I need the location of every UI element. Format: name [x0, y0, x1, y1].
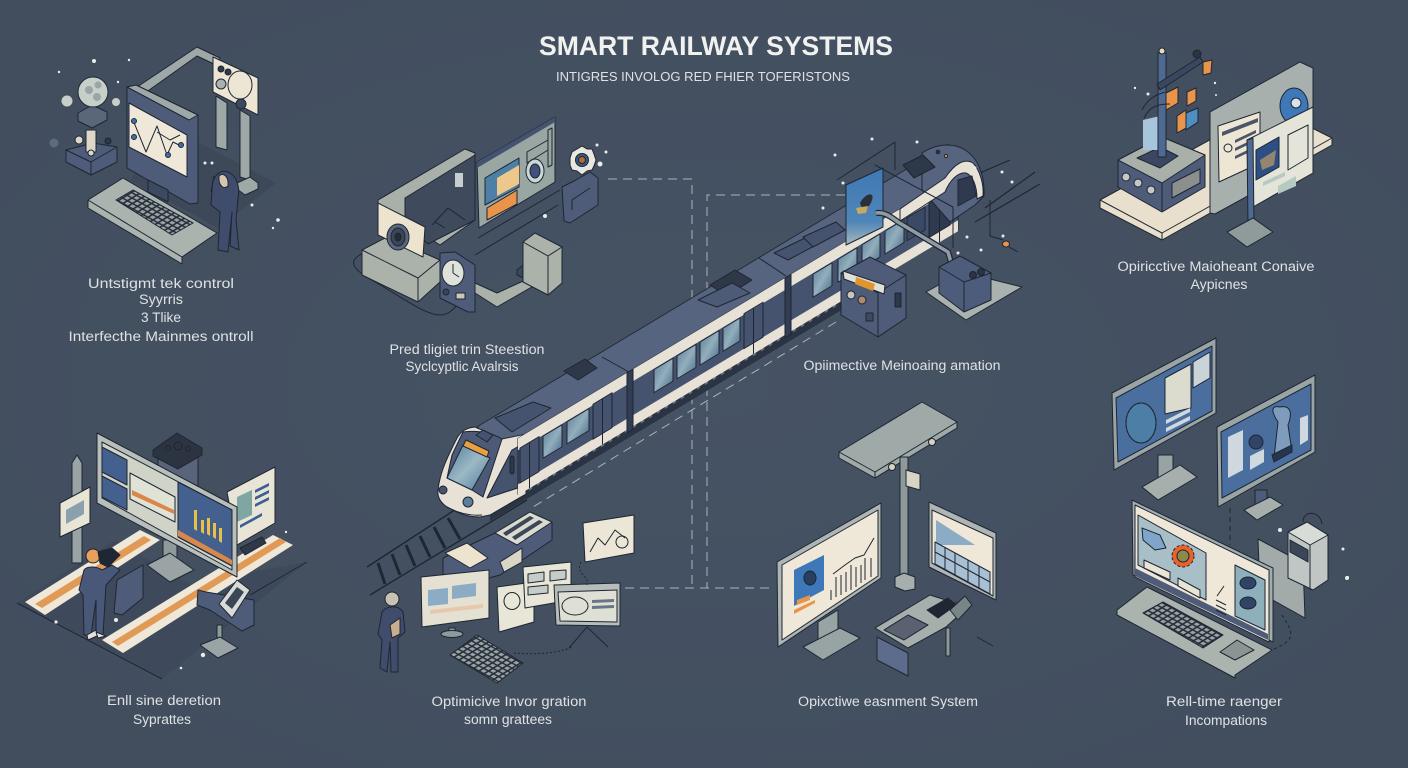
- pipe connecting train to unit: [876, 213, 952, 266]
- label: optimized integration: [432, 694, 586, 727]
- sparkle dots: [1278, 528, 1349, 580]
- panel: predictive train station: [354, 117, 608, 315]
- right cream monitor: [227, 467, 275, 555]
- label: bottom-left: Syprattes: [133, 712, 191, 727]
- gauge monitor on tripod: [554, 583, 620, 648]
- sign board: [213, 57, 258, 115]
- panel: bottom-left operations: [17, 433, 307, 679]
- side glass panel: [1258, 539, 1305, 618]
- floor: [17, 540, 307, 679]
- gantry legs: [216, 96, 258, 195]
- platform strip right: [102, 535, 293, 653]
- floor shadow: [130, 130, 276, 228]
- person at desk: [211, 171, 239, 252]
- holographic data panel on train: [837, 142, 1003, 248]
- monitor stand: [147, 540, 194, 582]
- train nose: [438, 427, 530, 517]
- dashed link: [1229, 508, 1231, 545]
- train doors: [520, 190, 950, 494]
- operator figure: [378, 592, 405, 672]
- rooftop unit: [153, 433, 202, 490]
- label: top-left: Syyrris: [139, 292, 183, 307]
- label: top-left: Untstigmt tek control: [88, 276, 234, 291]
- maintenance unit with plate: [926, 256, 1022, 320]
- touch pad: [1220, 640, 1254, 660]
- blue post and foot: [1227, 138, 1273, 247]
- right table monitor: [929, 502, 996, 600]
- dashed connector lines: [533, 179, 845, 588]
- pointer arrow: [977, 637, 993, 646]
- server unit: [1288, 513, 1328, 590]
- label: top-right: Aypicnes: [1190, 277, 1248, 292]
- label: bottom-left: [107, 693, 221, 727]
- main monitor C: [1132, 500, 1273, 642]
- label: top-right: Opiricctive Maioheant Conaive: [1118, 259, 1314, 274]
- signal pole: [1142, 48, 1212, 157]
- controller box: [562, 172, 598, 223]
- big wall display: [97, 433, 237, 577]
- terminal on stand: [197, 580, 254, 658]
- train roof: [478, 144, 948, 528]
- canopy plate: [839, 402, 957, 478]
- sparkle dots: [54, 531, 287, 669]
- wall box: [523, 233, 562, 295]
- left analytics monitor: [777, 503, 881, 660]
- globe on pedestal: [50, 77, 120, 175]
- dashboard monitor: [421, 570, 489, 638]
- label: predictive train station: Syclcyptlic Avalrsis: [406, 359, 519, 374]
- label: real-time passenger: [1166, 694, 1283, 728]
- desk: [88, 178, 217, 264]
- panel: top-right monitoring: [1100, 48, 1332, 247]
- subtitle: INTIGRES INVOLOG RED FHIER TOFERISTONS: [556, 70, 850, 84]
- train rear arch: [900, 145, 984, 222]
- L pipe: [475, 272, 544, 307]
- label: top-left: 3 Tlike: [141, 310, 181, 325]
- desk: [1117, 587, 1272, 678]
- sparkle dots: [58, 59, 280, 229]
- panel: assessment system: [777, 402, 996, 676]
- cable lines: [514, 562, 587, 654]
- camera base box: [362, 237, 440, 302]
- train body cars: [518, 174, 958, 498]
- signal box: [1118, 137, 1205, 212]
- front document panel: [1247, 107, 1313, 207]
- person with headset: [79, 548, 120, 640]
- keyboard: [116, 190, 193, 235]
- railway track: [367, 160, 1040, 595]
- label: bottom-left: Enll sine deretion: [107, 693, 221, 708]
- control cabinet beside train: [841, 257, 906, 337]
- label: optimective maintenance: Opiimective Meinoaing amation: [804, 358, 1000, 373]
- pipe clamp: [517, 260, 536, 280]
- panel: top-left control system: [50, 47, 280, 264]
- control desk: [875, 595, 972, 676]
- cream base plate: [1100, 107, 1332, 240]
- ring chart card: [497, 582, 534, 632]
- keyboard: [1143, 602, 1223, 648]
- train roof equipment: [495, 155, 935, 432]
- label: predictive train station: [390, 342, 544, 374]
- label: top-right: [1118, 259, 1314, 292]
- panel: optimized integration: [378, 512, 634, 683]
- sparkle dots: [543, 144, 608, 218]
- label: real-time passenger: Rell-time raenger: [1166, 694, 1283, 709]
- cable loop: [354, 250, 460, 315]
- grey frame and dark panel: [378, 149, 475, 245]
- monitor with wave chart: [127, 85, 198, 204]
- sparkle dots around train: [822, 138, 1014, 254]
- label: real-time passenger: Incompations: [1185, 713, 1267, 728]
- clock panel: [440, 252, 475, 312]
- train windows: [543, 207, 925, 459]
- monitor B bulb screen: [1217, 375, 1315, 520]
- label: predictive train station: Pred tligiet trin Steestion: [390, 342, 544, 357]
- line chart card: [583, 515, 634, 562]
- grey display panel: [1210, 62, 1313, 214]
- title: SMART RAILWAY SYSTEMS: [539, 31, 893, 61]
- panel: real-time passenger information: [1112, 338, 1349, 678]
- monitor A globe screen: [1112, 338, 1216, 500]
- kiosk: [114, 565, 143, 615]
- pole: [895, 457, 920, 591]
- gear badge: [570, 146, 596, 175]
- label: top-left: [68, 276, 254, 344]
- flow diagram card: [523, 562, 571, 608]
- dotted cable: [1272, 615, 1291, 650]
- monitor stand: [148, 180, 168, 202]
- label: top-left: Interfecthe Mainmes ontroll: [68, 329, 254, 344]
- main dashboard screen: [477, 117, 555, 228]
- orange sensor marker: [1002, 241, 1018, 252]
- train: [438, 144, 984, 528]
- label: assessment system: Opixctiwe easnment System: [798, 694, 978, 709]
- platform strip left: [25, 530, 160, 615]
- label: optimized integration: somn grattees: [464, 712, 552, 727]
- label: optimized integration: Optimicive Invor gration: [432, 694, 586, 709]
- gantry arch: [137, 47, 220, 93]
- connector lines: [475, 190, 560, 255]
- sparkle dots: [1134, 82, 1217, 96]
- camera panel: [378, 203, 425, 257]
- equipment rack: [443, 512, 552, 590]
- keyboard: [450, 635, 523, 683]
- signal post: [60, 455, 90, 563]
